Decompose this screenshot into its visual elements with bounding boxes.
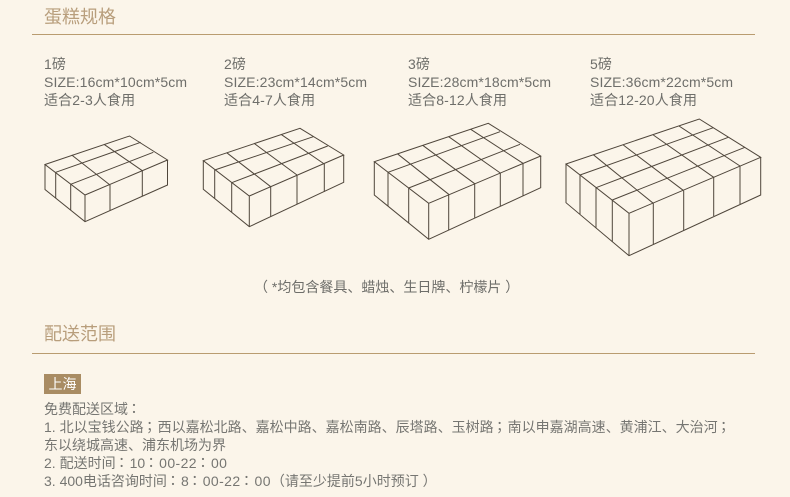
spec: 3 pound: SIZE:28cm*18cm*5cm — [408, 74, 551, 90]
spec: 3 pound: 适合8-12人食用 — [408, 92, 507, 108]
note: included accessories: （ *均包含餐具、蜡烛、生日牌、柠檬片 ） — [254, 279, 519, 295]
tag: Shanghai: 上海 — [48, 376, 76, 392]
box: 3 pound — [374, 123, 541, 239]
spec: 2 pound: 适合4-7人食用 — [224, 92, 315, 108]
spec: 2 pound — [224, 56, 367, 108]
spec: 1 pound: 适合2-3人食用 — [44, 92, 135, 108]
tag: Shanghai — [44, 374, 81, 394]
heading: delivery area: 配送范围 — [44, 324, 116, 344]
spec: 5 pound: 5磅 — [590, 56, 612, 72]
box: 1 pound — [45, 136, 168, 222]
delivery details: 东以绕城高速、浦东机场为界 — [44, 437, 226, 453]
delivery details: 1. 北以宝钱公路；西以嘉松北路、嘉松中路、嘉松南路、辰塔路、玉树路；南以申嘉湖高速、黄浦江、大治河； — [44, 418, 734, 435]
spec: 5 pound: SIZE:36cm*22cm*5cm — [590, 74, 733, 90]
heading: cake sizes: 蛋糕规格 — [44, 7, 116, 27]
spec: 5 pound: 适合12-20人食用 — [590, 92, 697, 108]
box: 2 pound — [203, 128, 344, 227]
delivery details: 3. 400电话咨询时间：8：00-22：00（请至少提前5小时预订 ） — [44, 472, 437, 489]
spec: 1 pound: SIZE:16cm*10cm*5cm — [44, 74, 187, 90]
box: 5 pound — [566, 119, 761, 256]
delivery details: 2. 配送时间：10：00-22：00 — [44, 454, 227, 471]
spec: 3 pound: 3磅 — [408, 56, 430, 72]
spec: 1 pound — [44, 56, 187, 108]
delivery details — [44, 400, 734, 489]
delivery details: 免费配送区域： — [44, 400, 144, 417]
spec: 5 pound — [590, 56, 733, 108]
spec: 2 pound: SIZE:23cm*14cm*5cm — [224, 74, 367, 90]
spec: 1 pound: 1磅 — [44, 56, 66, 72]
spec: 2 pound: 2磅 — [224, 56, 246, 72]
spec: 3 pound — [408, 56, 551, 108]
